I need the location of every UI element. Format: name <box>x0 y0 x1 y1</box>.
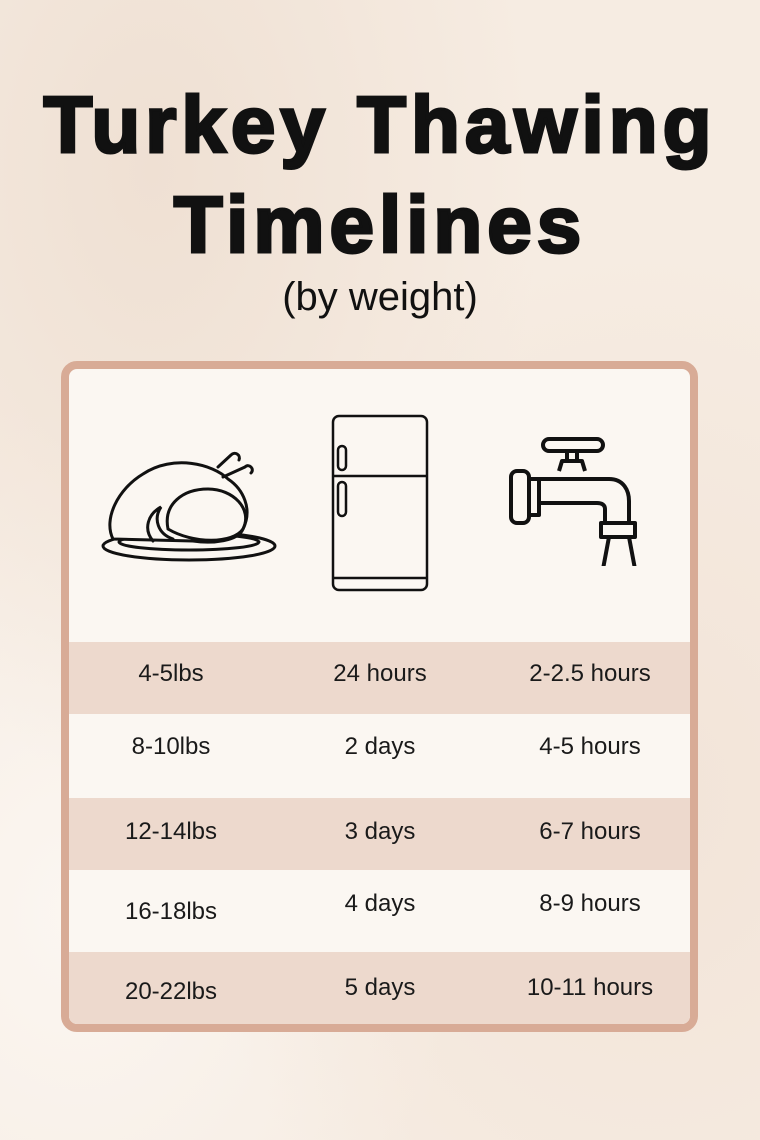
row 5: 20-22lbs <box>125 978 217 1005</box>
row 5 <box>69 952 690 1024</box>
caption: by weight: (by weight) <box>282 275 478 319</box>
icon: water tap <box>509 437 637 566</box>
row 1: 2-2.5 hours <box>529 660 651 687</box>
title: Turkey Thawing <box>43 80 717 169</box>
row 5: 5 days <box>345 974 415 1001</box>
row 1 <box>69 642 690 714</box>
icon: refrigerator <box>332 414 428 592</box>
row 4 <box>125 890 641 925</box>
row 3: 3 days <box>345 818 415 845</box>
row 4: 8-9 hours <box>539 890 641 917</box>
row 5: 10-11 hours <box>527 974 653 1001</box>
icon: turkey <box>102 452 276 562</box>
row 2: 4-5 hours <box>539 733 641 760</box>
panel: thawing table <box>61 361 698 1032</box>
row 2: 2 days <box>345 733 415 760</box>
row 4: 16-18lbs <box>125 898 217 925</box>
row 1: 24 hours <box>333 660 427 687</box>
row 1: 4-5lbs <box>138 660 204 687</box>
subtitle heading: Timelines <box>174 180 586 269</box>
row 4: 4 days <box>345 890 415 917</box>
row 3: 12-14lbs <box>125 818 217 845</box>
row 3 <box>69 798 690 870</box>
row 2 <box>132 733 641 760</box>
row 3: 6-7 hours <box>539 818 641 845</box>
row 2: 8-10lbs <box>132 733 210 760</box>
